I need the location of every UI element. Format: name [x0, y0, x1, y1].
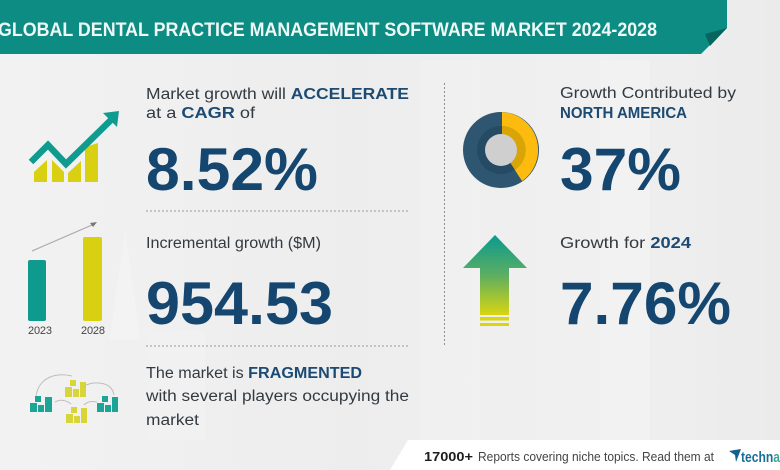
stat: 2024 growth: 7.76% — [560, 270, 731, 337]
center dashed divider — [444, 83, 446, 345]
stat: north america share: 37% — [560, 136, 681, 203]
text: market is fragmented: with several players occupying the — [145, 388, 409, 405]
icon: 2023 to 2028 bar chart: 2023 — [28, 325, 52, 337]
text: incremental growth: Incremental growth ($M) — [146, 235, 321, 252]
footer band: Reports covering niche topics. Read them at — [478, 450, 714, 464]
logo: technavio — [729, 449, 741, 462]
title: GLOBAL DENTAL PRACTICE MANAGEMENT SOFTWARE MARKET 2024-2028 — [0, 19, 657, 41]
icon: donut chart — [463, 112, 539, 188]
text: at a CAGR of: at a CAGR of — [146, 105, 256, 122]
footer band — [390, 440, 780, 470]
icon: growth chart with arrow — [31, 111, 119, 182]
stat: CAGR value: 8.52% — [146, 136, 318, 203]
text: market is fragmented — [145, 365, 409, 429]
text: market is fragmented: market — [146, 412, 200, 429]
divider — [146, 210, 409, 212]
icon: fragmented market blocks — [30, 375, 118, 423]
footer text: 17000+ — [424, 449, 473, 464]
text: growth for 2024: Growth for 2024 — [560, 235, 691, 252]
stat: incremental growth value: 954.53 — [146, 270, 333, 337]
icon: 2023 to 2028 bar chart: 2028 — [81, 325, 105, 337]
divider — [146, 345, 409, 347]
text: north america: NORTH AMERICA — [560, 105, 687, 122]
text: market is fragmented: The market is FRAGMENTED — [146, 365, 362, 382]
icon: up arrow — [463, 235, 527, 326]
icon: 2023 to 2028 bar chart — [28, 222, 105, 337]
text: market growth: Market growth will ACCELERATE — [146, 86, 409, 103]
text: growth contributed by: Growth Contributed by — [560, 85, 736, 102]
title banner — [0, 0, 727, 54]
